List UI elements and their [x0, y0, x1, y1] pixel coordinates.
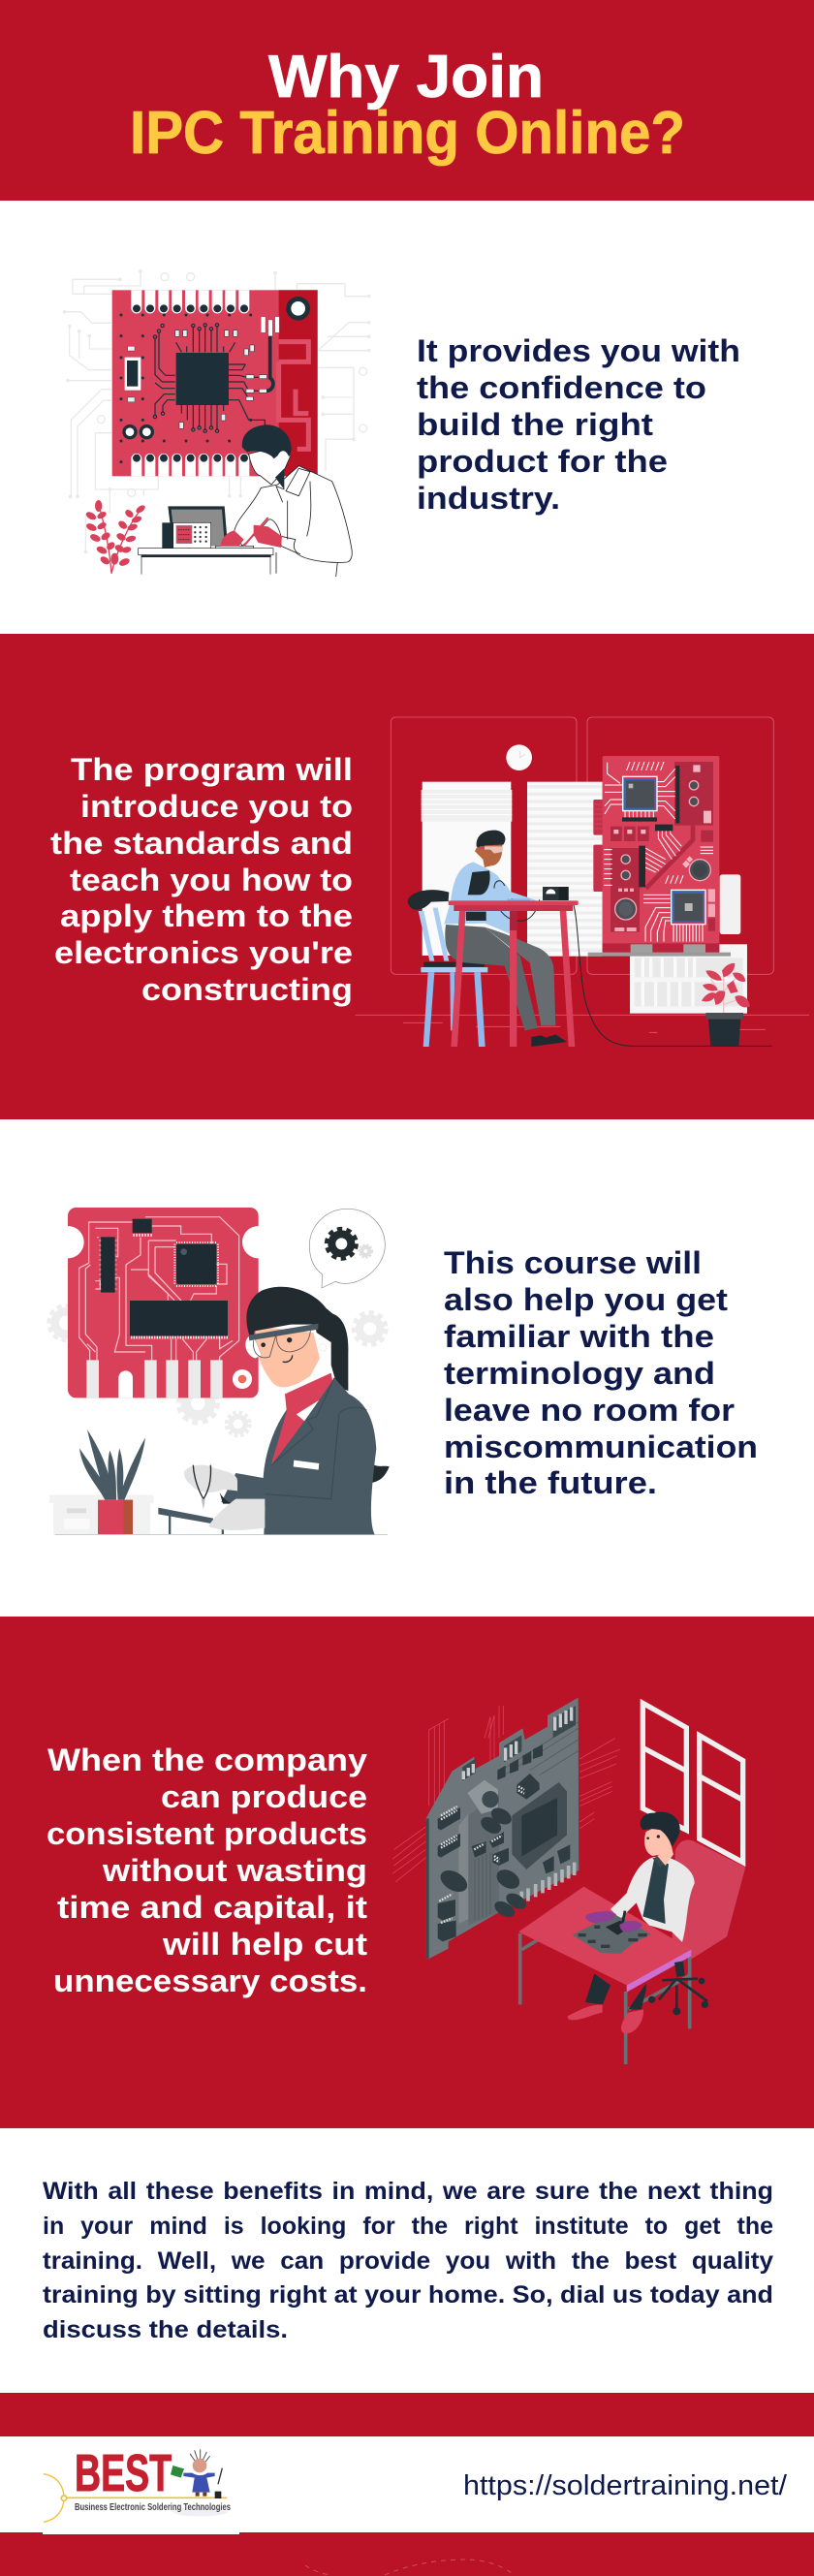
panel: standards benefit: [0, 634, 814, 1119]
chair: [408, 890, 487, 1047]
circuit board: [112, 290, 318, 476]
benefit text: without wasting: [102, 1853, 367, 1888]
laptop and instrument: [162, 506, 228, 549]
benefit text: terminology and: [444, 1356, 715, 1391]
logo: BEST: BEST: [75, 2444, 172, 2502]
benefit text: teach you how to: [70, 863, 353, 897]
chair back: [672, 1839, 745, 1960]
background gears: [48, 1305, 386, 1435]
benefit text: consistent products: [47, 1816, 367, 1851]
benefit text: unnecessary costs.: [53, 1963, 367, 1998]
benefit text: [50, 752, 353, 1007]
benefit text: product for the: [417, 444, 668, 479]
benefit text: the confidence to: [417, 370, 706, 405]
chips: [622, 766, 705, 925]
capacitors: [615, 781, 710, 920]
panel: page header: [0, 0, 814, 201]
circuit board: [425, 1698, 579, 1960]
paragraph text: With all these benefits in mind, we are sure the next thing: [43, 2178, 773, 2205]
background furniture: [630, 874, 747, 1014]
windows: [642, 1703, 743, 1863]
benefit text: will help cut: [162, 1927, 367, 1962]
wall outlines and floor lines: [356, 717, 809, 1032]
small board on desk: [573, 1914, 651, 1954]
worker: [568, 1812, 708, 2033]
bench: [55, 1508, 388, 1535]
lower contact strip: [521, 1863, 575, 1904]
cable: [573, 901, 772, 1046]
windows with blinds: [422, 782, 603, 957]
soldering station: [507, 887, 569, 901]
benefit text: miscommunication: [444, 1429, 758, 1464]
main processor: [512, 1782, 567, 1869]
circuit board: [588, 756, 731, 957]
benefit text: also help you get: [444, 1282, 728, 1317]
illustration: man assembling a circuit board: [65, 271, 369, 577]
wall clock: [506, 744, 532, 770]
paragraph text: [43, 2178, 773, 2343]
title: [130, 44, 685, 167]
benefit text: the standards and: [50, 826, 353, 861]
benefit text: electronics you're: [54, 935, 353, 970]
logo mark: [44, 2449, 228, 2522]
speech bubble with gears: [309, 1209, 385, 1288]
panel: terminology benefit: [0, 1119, 814, 1617]
benefit text: The program will: [71, 752, 353, 787]
benefit text: [47, 1743, 367, 1998]
benefit text: introduce you to: [80, 789, 353, 824]
title: Why Join: [268, 44, 544, 110]
panel: confidence benefit: [0, 201, 814, 634]
illustration: technician soldering at a desk: [356, 717, 809, 1047]
faint background traces: [392, 1706, 620, 1882]
benefit text: can produce: [161, 1779, 367, 1814]
benefit text: [444, 1245, 758, 1500]
desk: [518, 1887, 691, 2064]
benefit text: apply them to the: [60, 898, 353, 933]
benefit text: leave no room for: [444, 1393, 735, 1428]
title: IPC Training Online?: [130, 100, 685, 167]
paragraph text: training. Well, we can provide you with the best quality: [43, 2247, 773, 2275]
technician: [444, 831, 567, 1047]
benefit text: industry.: [417, 481, 560, 516]
box and plant: [49, 1429, 153, 1535]
panel: cost benefit: [0, 1617, 814, 2128]
desk: [449, 900, 579, 1047]
benefit text: It provides you with: [417, 333, 740, 368]
illustration: engineer with tweezers and circuit board: [48, 1208, 390, 1535]
logo tagline: Business Electronic Soldering Technologies: [75, 2501, 231, 2513]
engineer: [184, 1287, 390, 1534]
microchip and traces: [153, 324, 265, 432]
benefit text: in the future.: [444, 1465, 657, 1500]
paragraph text: in your mind is looking for the right institute to get the: [43, 2213, 773, 2240]
benefit text: [417, 333, 740, 516]
panel: footer band: [0, 2393, 814, 2576]
potted plant: [702, 963, 750, 1046]
benefit text: constructing: [141, 972, 353, 1007]
website url: https://soldertraining.net/: [463, 2470, 788, 2501]
red plant: [84, 500, 146, 574]
board traces: [594, 762, 713, 942]
benefit text: This course will: [444, 1245, 702, 1280]
logo: BEST: [44, 2444, 231, 2522]
capacitors and chips: [437, 1744, 570, 1941]
benefit text: build the right: [417, 407, 653, 442]
benefit text: time and capital, it: [57, 1890, 367, 1925]
benefit text: When the company: [47, 1743, 367, 1777]
desk: [139, 546, 273, 575]
panel: closing paragraph: [0, 2128, 814, 2393]
illustration: isometric circuit board and worker: [392, 1698, 745, 2064]
man: [221, 424, 352, 577]
circuit board: [68, 1208, 259, 1398]
benefit text: familiar with the: [444, 1319, 714, 1354]
background circuit lines: [65, 271, 369, 552]
paragraph text: discuss the details.: [43, 2316, 288, 2343]
paragraph text: training by sitting right at your home. So, dial us today and: [43, 2281, 773, 2309]
